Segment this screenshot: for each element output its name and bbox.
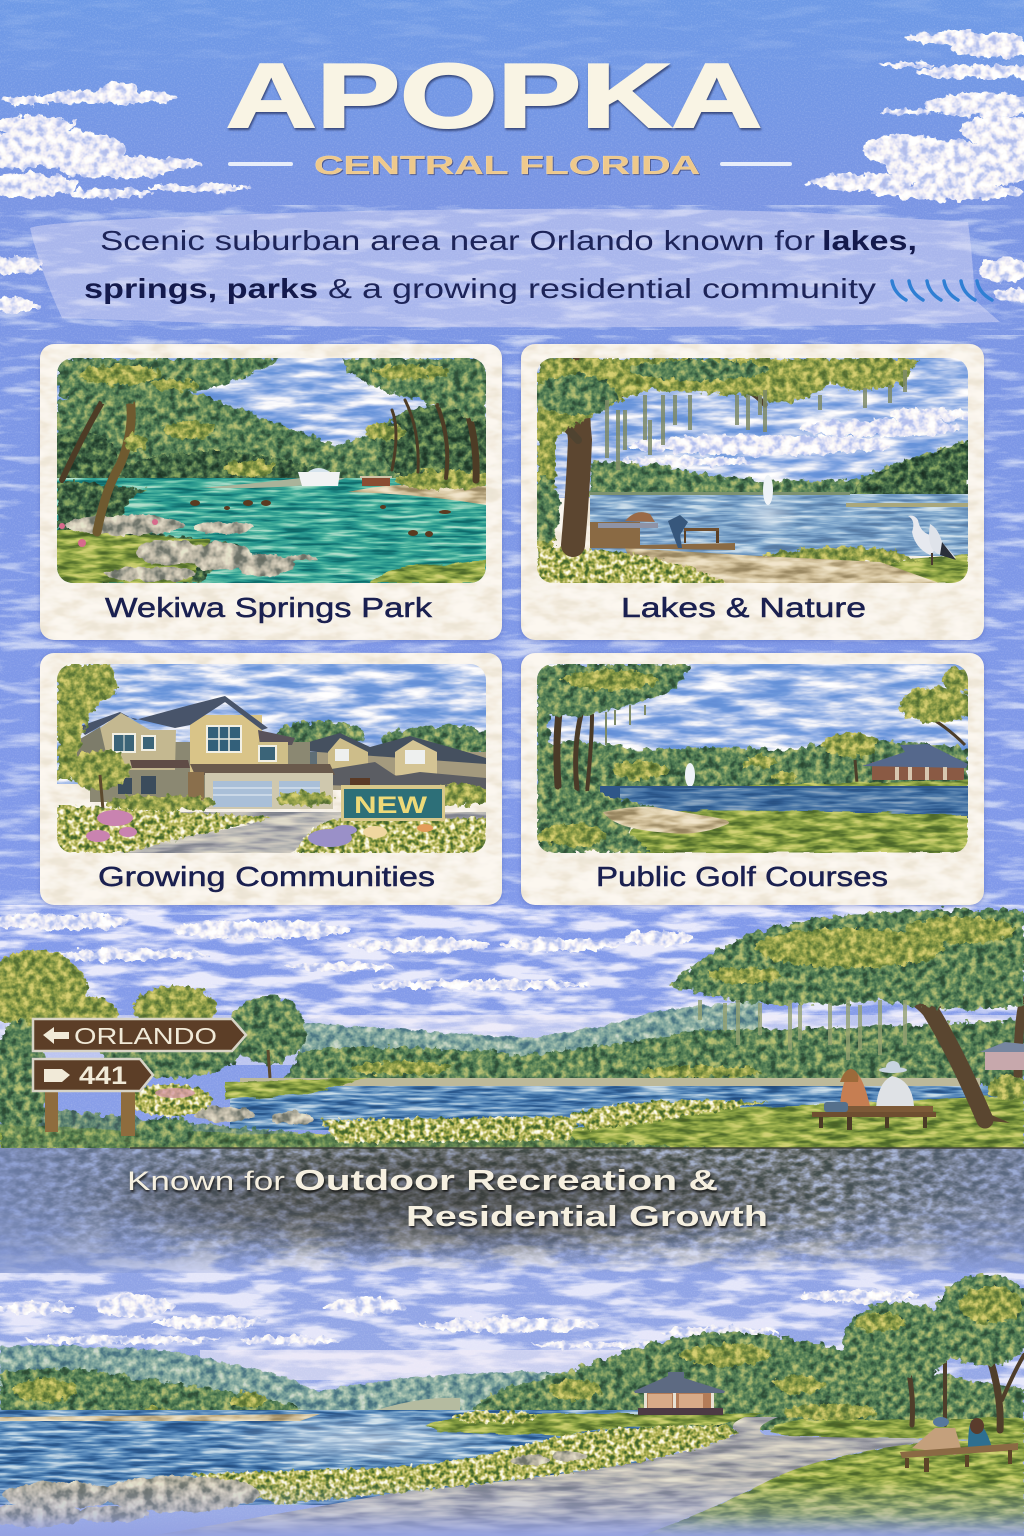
moss oak	[820, 960, 1024, 1120]
left bank and flowers	[57, 480, 240, 583]
clouds above bottom scene	[0, 1290, 920, 1348]
tagline line 1: Scenic suburban area near Orlando known for	[100, 225, 815, 256]
subtitle: Central Florida with rules	[228, 150, 792, 180]
bench and visitors	[900, 1417, 1018, 1472]
clubhouse	[862, 744, 968, 780]
bunker	[603, 807, 729, 834]
left trees	[557, 700, 592, 792]
far shore and water	[240, 1078, 980, 1087]
garage doors	[213, 781, 272, 807]
fairway strip and pond	[720, 780, 968, 800]
swimmers	[190, 500, 451, 537]
gazebo	[634, 1372, 725, 1415]
panel: Growing Communities	[40, 653, 502, 905]
panel: Wekiwa Springs Park	[40, 344, 502, 640]
icon: water waves	[892, 281, 992, 300]
dock and people	[590, 512, 735, 550]
flower beds	[190, 1425, 738, 1505]
label: Growing Communities	[98, 861, 435, 892]
main home	[75, 696, 335, 809]
tagline banner	[30, 209, 1000, 327]
illustration: lake with fountain and birds	[531, 358, 970, 585]
tagline line 2 bold: springs, parks	[84, 273, 318, 304]
island	[425, 1414, 765, 1436]
label: Wekiwa Springs Park	[105, 592, 433, 623]
tagline line 2: & a growing residential community	[328, 273, 876, 304]
right trees	[900, 1345, 1024, 1430]
right homes	[309, 733, 486, 790]
caption: known for	[127, 1165, 768, 1233]
icon: right arrow	[44, 1069, 70, 1082]
dusk ground band	[0, 1142, 1024, 1273]
fountain	[740, 475, 797, 534]
label: Public Golf Courses	[596, 861, 888, 892]
caption: known for: Outdoor Recreation &	[294, 1165, 718, 1197]
far shore right	[348, 484, 486, 505]
distant forest	[300, 1000, 760, 1085]
panel: Public Golf Courses	[521, 653, 984, 905]
water	[0, 1410, 640, 1505]
tagline bold word: lakes,	[822, 225, 917, 256]
caption: known for: Known for	[127, 1166, 285, 1196]
near shore	[0, 1414, 320, 1421]
left forest	[0, 1368, 310, 1420]
scene: riverside path with gazebo	[0, 1274, 1024, 1536]
subtitle: Central Florida with rules: CENTRAL FLORIDA	[314, 150, 700, 180]
flower beds	[57, 805, 486, 853]
shore, path and foreground	[883, 554, 968, 583]
footpath	[150, 1417, 925, 1536]
boats	[298, 468, 392, 486]
shrubs	[537, 785, 660, 853]
panel: Lakes & Nature	[521, 344, 984, 640]
left trees	[57, 664, 130, 790]
trees and canopy	[62, 385, 476, 532]
signpost: Orlando and 441	[33, 1019, 246, 1136]
caption: known for: Residential Growth	[406, 1201, 768, 1233]
bottom fade	[0, 1480, 1024, 1536]
clouds: lower sides of header	[0, 256, 1024, 312]
windows	[206, 725, 242, 753]
illustration: spring with swimmers	[40, 358, 500, 583]
NEW sign: NEW	[354, 792, 427, 819]
sign text: Orlando: ORLANDO	[74, 1023, 217, 1049]
NEW sign	[341, 785, 445, 821]
scene: lake park with oak and bench	[0, 909, 1024, 1150]
driveway	[120, 812, 486, 853]
grass bank	[0, 1095, 1024, 1150]
oak tree trunk, canopy and moss	[545, 360, 765, 545]
far house	[980, 1042, 1024, 1070]
illustration: golf course	[537, 664, 978, 853]
left trees	[0, 950, 217, 1048]
bench and visitors	[812, 1061, 936, 1130]
illustration: new homes	[57, 664, 500, 853]
title: APOPKA	[226, 46, 762, 147]
fountain	[685, 763, 695, 787]
rocks	[65, 515, 318, 581]
far hills	[0, 1346, 600, 1420]
rocks and flower beds	[195, 1106, 315, 1125]
birds	[908, 516, 956, 565]
icon: left arrow	[43, 1027, 69, 1044]
clouds above park scene	[0, 914, 695, 990]
clouds: top right	[808, 32, 1024, 200]
shoreline rocks	[0, 1450, 588, 1527]
pink flowers	[59, 519, 158, 547]
label: Lakes & Nature	[621, 592, 866, 623]
shrubs	[105, 784, 495, 811]
right forest	[465, 1333, 1024, 1430]
sign text: 441: 441	[79, 1062, 127, 1090]
right park grass	[770, 1418, 1024, 1442]
clouds: top left	[0, 83, 250, 198]
